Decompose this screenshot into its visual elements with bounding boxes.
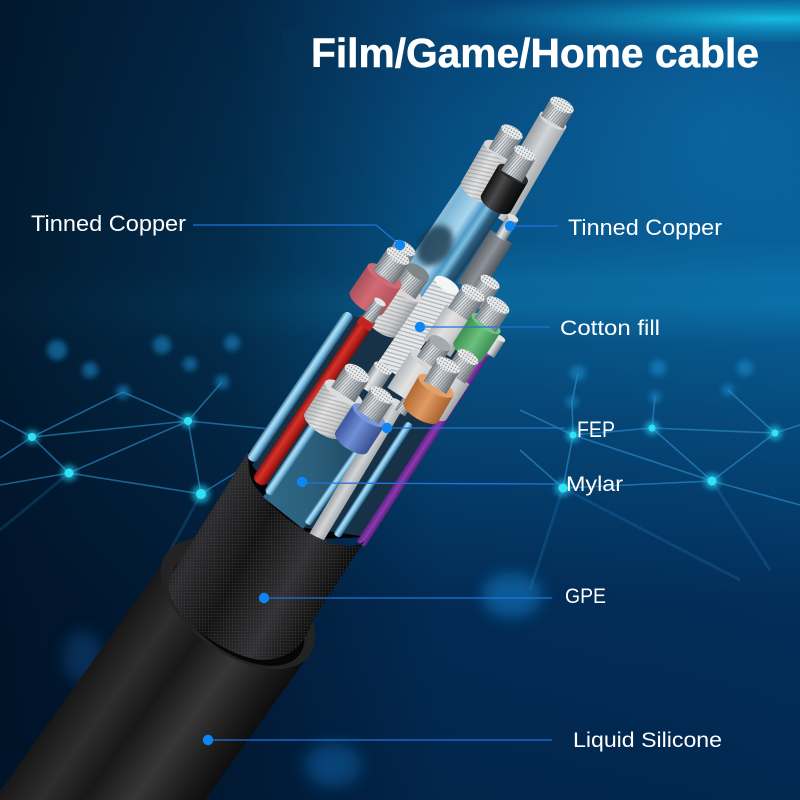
callout: GPE (259, 585, 606, 608)
wire: pink jacket conductor (346, 240, 418, 320)
callout: tinned copper left (31, 211, 405, 250)
callout: cotton fill: Cotton fill (560, 317, 660, 340)
callout: liquid silicone (203, 729, 722, 752)
wire: green jacket conductor (450, 291, 516, 366)
callout: tinned copper left: Tinned Copper (31, 211, 186, 236)
wire: whitish jacket conductor (362, 256, 437, 342)
wire: red tube (252, 316, 374, 488)
wire: lower left light blue strip (264, 414, 324, 497)
wire: lower right light blue strip (304, 445, 364, 526)
wire: back tinned conductor (382, 237, 418, 275)
wire: tinned copper silver conductor with silver jacket (457, 118, 531, 208)
wire: small dark grey conductor (457, 209, 526, 296)
cable: outer liquid silicone sheath (0, 512, 339, 800)
callout: Mylar: Mylar (566, 473, 623, 496)
callout: cotton fill (415, 317, 660, 340)
background: network lines and nodes (0, 335, 800, 590)
wire: mylar foil panel (263, 423, 360, 529)
wire: back right conductor (466, 272, 502, 311)
wire: white jacket conductor behind orange (416, 344, 484, 425)
callout: tinned copper right: Tinned Copper (568, 215, 722, 240)
wire: red conductor overlay (357, 295, 388, 331)
wire: purple tube conductor (484, 333, 506, 358)
wire: back grey jacket strand (484, 92, 578, 225)
cable: inner wire bundle base (248, 446, 368, 540)
wire bundle: dark backing (252, 315, 487, 537)
title: Film/Game/Home cable (311, 30, 759, 76)
wire: FEP grey tube (307, 396, 406, 546)
wire: black filler behind cotton (420, 309, 454, 353)
wire: cotton fill rod (378, 272, 462, 378)
callout: FEP: FEP (577, 417, 615, 442)
callout: FEP (382, 417, 615, 442)
callout: GPE: GPE (565, 585, 606, 608)
wire: FEP tube conductor (395, 388, 419, 416)
wire: mid white jacket conductor (387, 327, 460, 409)
wire: white jacket conductor right (424, 279, 490, 357)
callout: tinned copper right (505, 215, 722, 240)
wire: conductor with black jacket (477, 140, 542, 219)
wire: purple tube (357, 348, 491, 547)
wire: large foil shield (355, 178, 505, 365)
callout: liquid silicone: Liquid Silicone (573, 729, 722, 752)
wire: blue jacket conductor (331, 380, 401, 459)
wire: back lower conductor (359, 359, 394, 397)
wire: right light blue strip (333, 421, 413, 538)
wire: left light blue tube (246, 310, 355, 464)
wire: lower white jacket conductor (300, 356, 379, 445)
wire: orange jacket conductor (400, 350, 468, 429)
cable: knurled GPE layer (169, 452, 367, 660)
callout: Mylar (297, 473, 623, 496)
